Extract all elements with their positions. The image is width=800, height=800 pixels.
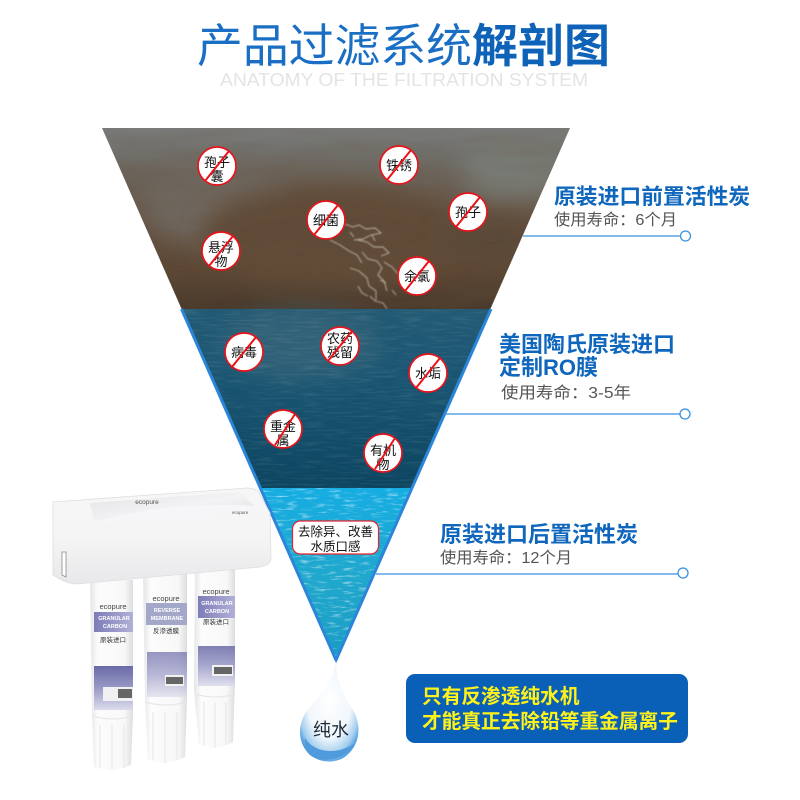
contaminant badge: 病毒: 病毒 [231, 345, 257, 360]
stage 2 description: 美国陶氏原装进口 [499, 332, 675, 357]
funnel stage 3: clear water [262, 488, 410, 656]
filter cartridge: middle: ecopure [152, 594, 180, 603]
contaminant badge: 农药残留 [321, 327, 359, 365]
stage 1 description [523, 184, 750, 241]
contaminant badge: 有机物 [364, 434, 402, 472]
contaminant badge: 铁锈: 铁锈 [386, 158, 412, 173]
filter cartridge: left: CARBON [103, 624, 127, 630]
contaminant badge: 农药残留: 残留 [327, 345, 353, 360]
callout: reverse osmosis note: 才能真正去除铅等重金属离子 [422, 710, 678, 733]
housing [53, 488, 271, 584]
contaminant badge: 有机物: 有机 [370, 443, 396, 458]
filter cartridge: middle: 反渗透膜 [153, 626, 180, 635]
filter cartridge: left: GRANULAR [98, 616, 130, 622]
contaminant badge: 余氯: 余氯 [404, 269, 430, 284]
filtration funnel [102, 128, 580, 660]
callout: taste improvement [292, 521, 378, 554]
contaminant badge: 悬浮物 [202, 232, 240, 270]
filter cartridge: left [90, 580, 133, 770]
filter cartridge: middle [143, 574, 187, 763]
connector 3 [376, 568, 688, 578]
contaminant badge: 铁锈 [380, 146, 418, 184]
filter cartridge: right [194, 565, 235, 748]
contaminant badge: 有机物: 物 [376, 457, 390, 472]
contaminant badge: 孢子 [449, 193, 487, 231]
filter cartridge: middle: MEMBRANE [151, 616, 184, 622]
title: 解剖图 [472, 20, 610, 72]
contaminant badge: 重金属: 重金 [270, 419, 296, 434]
stage 3 description [376, 522, 688, 578]
filter cartridge: right: ecopure [202, 587, 230, 596]
stage 1 description: 使用寿命：6个月 [554, 211, 677, 229]
callout: reverse osmosis note: 只有反渗透纯水机 [422, 685, 580, 708]
contaminant badge: 悬浮物: 悬浮 [208, 240, 234, 255]
housing: ecopure [232, 510, 249, 515]
funnel stage 1: muddy water [102, 128, 580, 309]
contaminant badge: 重金属: 属 [276, 433, 290, 448]
callout: taste improvement: 去除异、改善 [298, 524, 373, 539]
contaminant badge: 孢子囊: 囊 [210, 169, 224, 184]
product: filter unit [53, 488, 271, 770]
contaminant badge: 水垢: 水垢 [415, 366, 441, 381]
connector 1 [523, 231, 690, 241]
filter cartridge: right: 原装进口 [203, 617, 229, 626]
filter cartridge: right: CARBON [205, 609, 229, 615]
title: 产品过滤系统 [197, 20, 472, 72]
water drop: pure water: 纯水 [313, 720, 349, 740]
contaminant badge: 水垢 [409, 354, 447, 392]
contaminant badge: 悬浮物: 物 [214, 254, 228, 269]
filter cartridge: middle: REVERSE [154, 608, 180, 614]
contaminant badge: 细菌: 细菌 [313, 213, 339, 228]
contaminant badge: 余氯 [398, 257, 436, 295]
subtitle: ANATOMY OF THE FILTRATION SYSTEM [220, 70, 588, 90]
connector 2 [445, 409, 690, 419]
stage 2 description: 定制RO膜 [499, 355, 598, 380]
contaminant badge: 孢子囊: 孢子 [204, 155, 230, 170]
housing: ecopure [135, 499, 159, 506]
water drop: pure water [300, 660, 358, 762]
stage 1 description: 原装进口前置活性炭 [554, 184, 750, 209]
filter cartridge: left: 原装进口 [100, 635, 126, 644]
contaminant badge: 孢子囊 [198, 147, 236, 185]
contaminant badge: 细菌 [307, 201, 345, 239]
filter cartridge: right: GRANULAR [201, 601, 233, 607]
title [197, 20, 610, 72]
callout: taste improvement: 水质口感 [310, 539, 361, 554]
contaminant badge: 病毒 [225, 333, 263, 371]
stage 3 description: 使用寿命：12个月 [440, 549, 572, 567]
foam [330, 224, 398, 309]
funnel border [182, 309, 491, 660]
callout: reverse osmosis note [406, 674, 688, 743]
stage 2 description: 使用寿命：3-5年 [501, 384, 631, 402]
filter cartridge: left: ecopure [99, 602, 127, 611]
stage 3 description: 原装进口后置活性炭 [440, 522, 638, 547]
contaminant badge: 农药残留: 农药 [327, 331, 353, 346]
contaminant badge: 孢子: 孢子 [455, 205, 481, 220]
funnel stage 2: deep water [183, 301, 490, 488]
contaminant badge: 重金属 [264, 410, 302, 448]
stage 2 description [445, 332, 690, 419]
